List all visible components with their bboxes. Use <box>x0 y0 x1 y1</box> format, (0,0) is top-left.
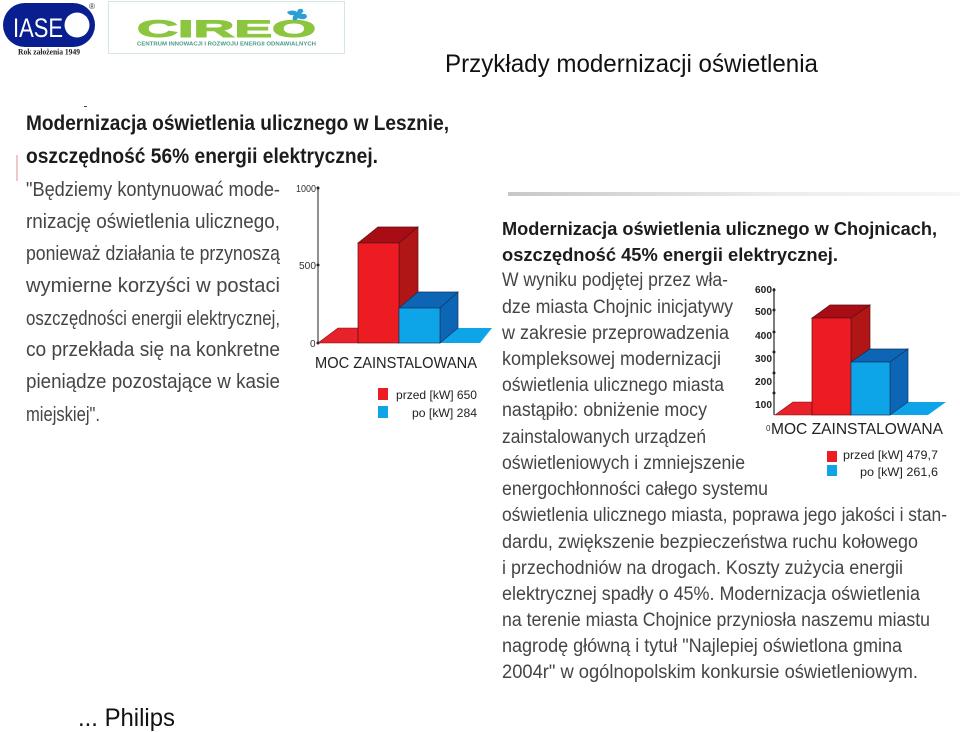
text block: Leszno quote: ponieważ działania te przynoszą <box>26 242 281 265</box>
legend: przed [kW] 479,7 <box>843 448 938 462</box>
text block: Chojnice body: oświetlenia ulicznego miasta <box>502 375 724 396</box>
bar chart: Leszno installed power <box>296 184 492 420</box>
legend: przed [kW] 650 <box>396 388 477 402</box>
floor: red <box>318 328 358 343</box>
text block: Chojnice body: w zakresie przeprowadzenia <box>501 323 729 344</box>
text block: Leszno quote: "Będziemy kontynuować mode- <box>26 178 280 201</box>
logo: CIREO: CIREO <box>137 16 316 43</box>
logo: CIREO: CENTRUM INNOWACJI I ROZWOJU ENERGII ODNAWIALNYCH <box>137 42 316 48</box>
footer: Philips: ... Philips <box>78 704 175 732</box>
bar: before, 479,7 kW <box>812 305 870 415</box>
legend: po [kW] 261,6 <box>860 465 938 479</box>
logo: IASE: ® <box>89 2 95 11</box>
axis caption: MOC ZAINSTALOWANA <box>315 355 477 372</box>
logo: CIREO <box>108 2 344 54</box>
axis with ticks: 0 <box>766 424 771 433</box>
text block: Leszno quote: co przekłada się na konkretne <box>26 338 280 361</box>
text block: Chojnice body: 2004r" w ogólnopolskim konkursie oświetleniowym. <box>502 662 918 683</box>
axis with ticks: 200 <box>755 377 772 388</box>
heading: Leszno: Modernizacja oświetlenia ulicznego w Lesznie, <box>26 112 449 135</box>
axis with ticks: 500 <box>755 307 772 318</box>
legend: po [kW] 284 <box>412 406 477 420</box>
axis with ticks <box>755 285 776 433</box>
axis with ticks: 0 <box>310 339 316 350</box>
heading: Chojnice: Modernizacja oświetlenia ulicznego w Chojnicach, <box>502 218 937 239</box>
text block: Chojnice body: oświetleniowych i zmniejszenie <box>502 453 745 474</box>
text block: Leszno quote: pieniądze pozostające w kasie <box>26 370 280 393</box>
text block: Chojnice body: elektrycznej spadły o 45%. Modernizacja oświetlenia <box>502 584 920 605</box>
axis with ticks: 400 <box>755 331 772 342</box>
text block: Chojnice body: i przechodniów na drogach. Koszty zużycia energii <box>502 558 903 579</box>
panel: Leszno scan <box>16 106 492 426</box>
bar chart: Chojnice installed power <box>755 285 946 479</box>
text block: Chojnice body: dze miasta Chojnic inicjatywy <box>502 297 733 318</box>
axis with ticks: 1000 <box>296 184 316 195</box>
legend <box>378 388 477 420</box>
title: Przykłady modernizacji oświetlenia <box>445 50 818 78</box>
axis with ticks: 500 <box>299 261 316 272</box>
bar: before, 650 kW <box>358 227 418 343</box>
heading: Leszno <box>26 112 449 168</box>
text block: Chojnice body: zainstalowanych urządzeń <box>502 427 706 448</box>
text block: Leszno quote: rnizację oświetlenia ulicznego, <box>26 210 280 233</box>
heading: Leszno: oszczędność 56% energii elektrycznej. <box>26 145 378 168</box>
panel: Chojnice scan <box>501 192 960 683</box>
floor: blue <box>890 402 946 415</box>
floor: red <box>775 402 812 415</box>
heading: Chojnice: oszczędność 45% energii elektrycznej. <box>502 244 838 265</box>
text block: Chojnice body: dardu, zwiększenie bezpieczeństwa ruchu kołowego <box>502 532 918 553</box>
text block: Chojnice body: kompleksowej modernizacji <box>502 349 721 370</box>
text block: Chojnice body: na terenie miasta Chojnice przyniosła naszemu miastu <box>502 610 930 631</box>
axis with ticks: 600 <box>755 285 772 296</box>
legend <box>827 448 938 479</box>
text block: Leszno quote: miejskiej". <box>26 403 100 426</box>
text block: Chojnice body <box>501 270 947 683</box>
axis with ticks: 300 <box>755 354 772 365</box>
text block: Leszno quote <box>25 178 281 426</box>
text block: Leszno quote: oszczędności energii elektrycznej, <box>26 307 280 330</box>
text block: Chojnice body: nagrodę główną i tytuł "Najlepiej oświetlona gmina <box>502 636 902 657</box>
axis caption: MOC ZAINSTALOWANA <box>771 421 943 438</box>
logo: IASE <box>3 2 95 56</box>
text block: Leszno quote: wymierne korzyści w postaci <box>25 274 280 297</box>
text block: Chojnice body: nastąpiło: obniżenie mocy <box>502 400 707 421</box>
text block: Chojnice body: energochłonności całego systemu <box>502 479 768 500</box>
bar: after, 284 kW <box>399 292 458 343</box>
logo: IASE: Rok założenia 1949 <box>18 46 80 56</box>
axis with ticks: 100 <box>755 400 772 411</box>
text block: Chojnice body: W wyniku podjętej przez wła- <box>502 270 728 291</box>
axis with ticks <box>296 184 320 350</box>
heading: Chojnice <box>502 218 937 265</box>
bar: after, 261,6 kW <box>851 349 908 415</box>
logo: IASE: IASE <box>13 13 63 43</box>
floor: blue <box>440 328 492 343</box>
